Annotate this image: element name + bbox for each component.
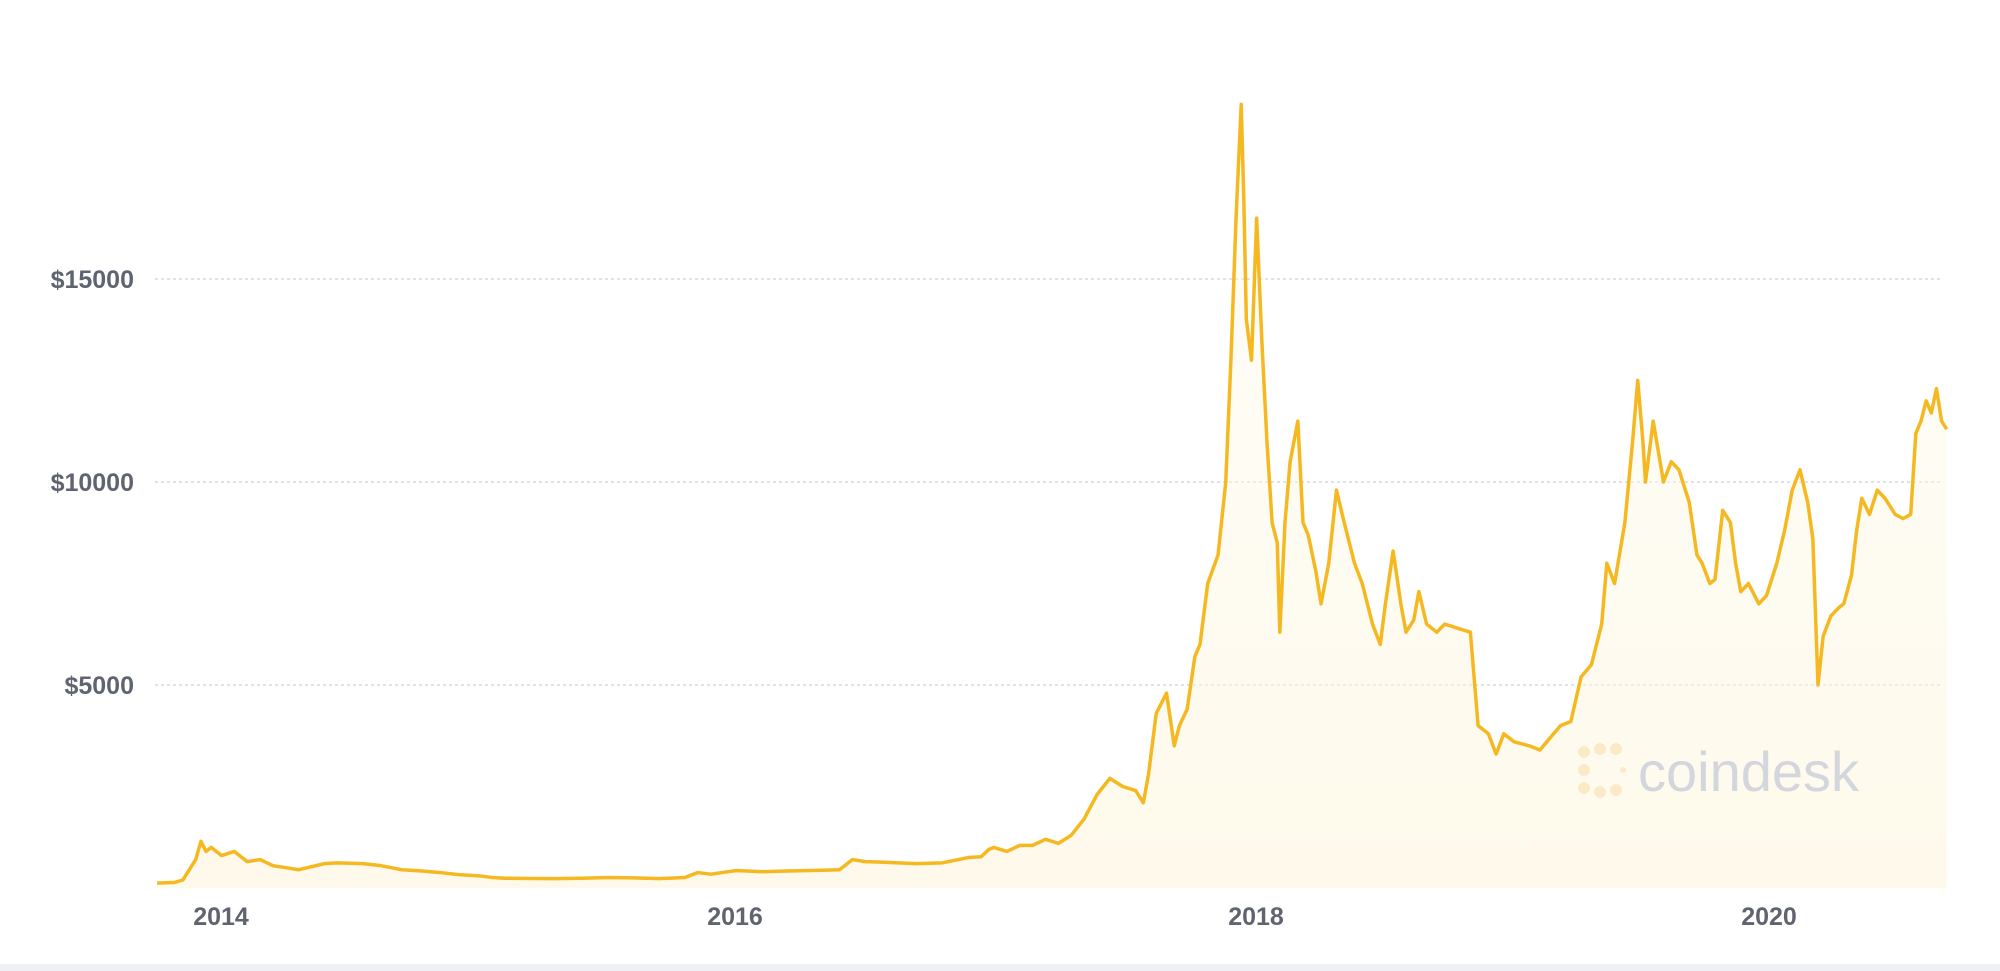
x-axis labels: 2014 — [193, 903, 249, 931]
watermark: coindesk: coindesk — [1638, 740, 1860, 803]
x-axis labels: 2016 — [707, 903, 763, 931]
price line — [157, 104, 1947, 888]
x-axis labels: 2018 — [1228, 903, 1284, 931]
x-axis labels: 2020 — [1741, 903, 1797, 931]
y-axis labels — [51, 266, 134, 700]
y-axis labels: $5000 — [64, 672, 134, 700]
y-axis labels: $10000 — [51, 469, 134, 497]
y-axis labels: $15000 — [51, 266, 134, 294]
x-axis labels — [193, 903, 1797, 931]
